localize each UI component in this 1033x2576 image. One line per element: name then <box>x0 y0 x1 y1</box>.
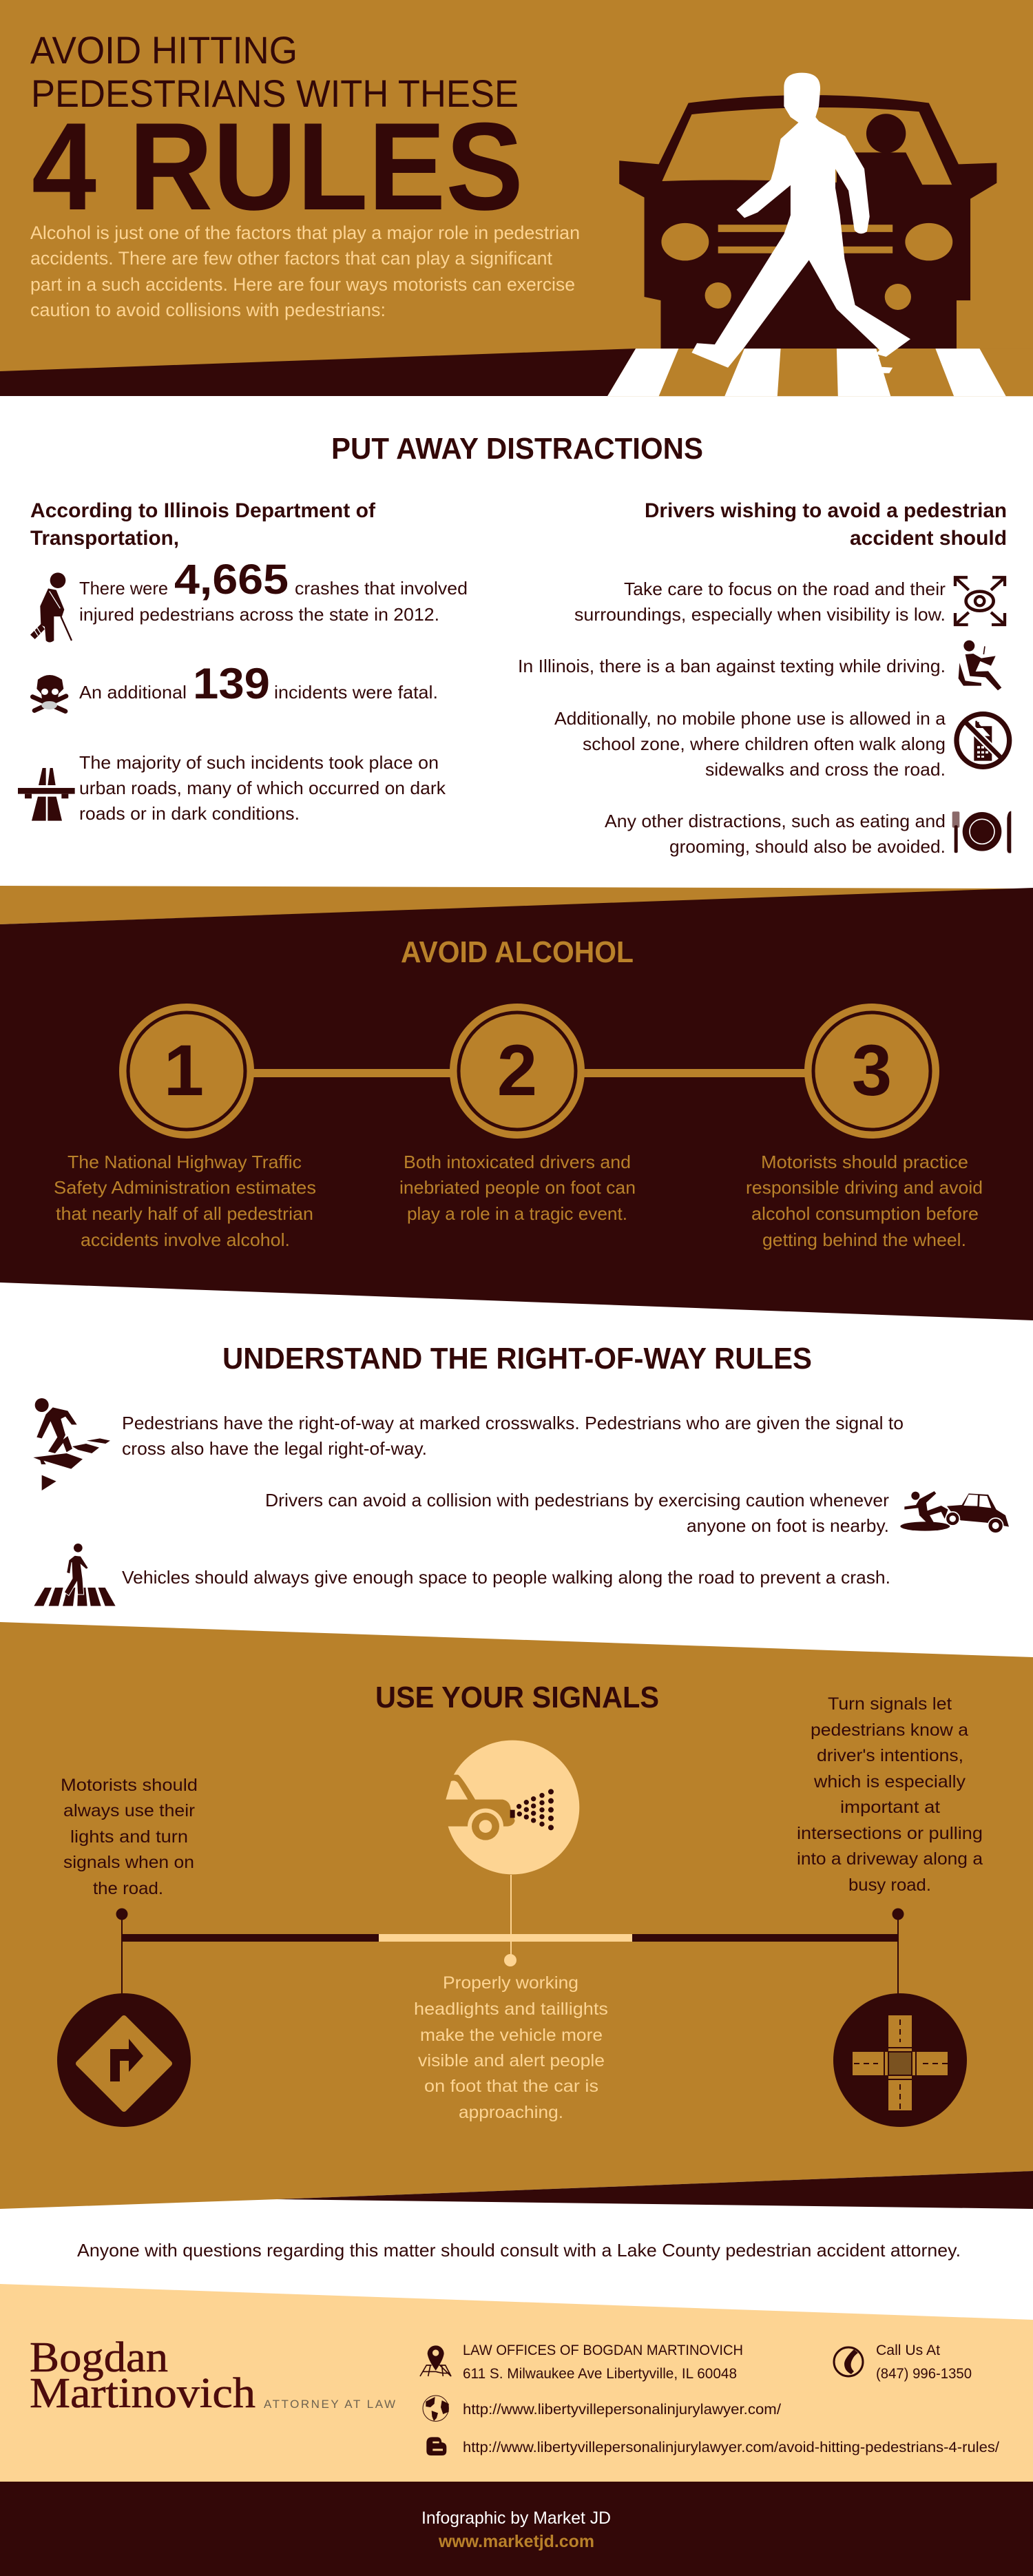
panel: driver guidance <box>518 499 1011 857</box>
stat: 4,665 crashes: injured pedestrians across the state in 2012. <box>79 604 439 625</box>
step 3 badge: 3 <box>852 1030 892 1111</box>
text: infographic by: Infographic by Market JD <box>421 2509 611 2528</box>
text: article url: http://www.libertyvillepersonalinjurylawyer.com/avoid-hitting-pedestrians-4-rules/ <box>463 2440 999 2455</box>
panel: use your signals <box>0 1622 1033 2209</box>
text: turn signals <box>797 1694 983 1895</box>
text: urban roads: The majority of such incidents took place on <box>79 752 439 773</box>
text: focus on road <box>574 579 946 625</box>
subheading: according to illinois <box>30 499 376 550</box>
heading: use your signals: USE YOUR SIGNALS <box>375 1681 659 1714</box>
text: office address <box>463 2343 743 2382</box>
icon: eye with arrows <box>955 577 1005 625</box>
text: motorists should use lights: the road. <box>93 1879 163 1898</box>
heading: put away distractions: PUT AWAY DISTRACTIONS <box>331 432 703 466</box>
text: working headlights: visible and alert people <box>418 2051 605 2070</box>
intro paragraph: accidents. There are few other factors that can play a significant <box>30 248 552 269</box>
step 1 text: The National Highway Traffic <box>67 1152 302 1172</box>
stat: 139 fatal incidents: incidents were fatal. <box>274 682 438 703</box>
step 2 text: inebriated people on foot can <box>399 1177 636 1198</box>
subheading: according to illinois: According to Illinois Department of <box>30 499 376 522</box>
stat: 139 fatal incidents: 139 <box>193 660 270 708</box>
text: texting ban: In Illinois, there is a ban against texting while driving. <box>518 656 946 676</box>
text: marked crosswalks: Pedestrians have the right-of-way at marked crosswalks. Pedestrians who are given the signal to <box>122 1413 904 1433</box>
icon: pedestrian on zebra crossing <box>34 1544 116 1606</box>
subheading: drivers wishing: Drivers wishing to avoid a pedestrian <box>645 499 1007 522</box>
text: focus on road: Take care to focus on the road and their <box>624 579 946 599</box>
text: phone number: (847) 996-1350 <box>876 2366 972 2382</box>
text: phone number: Call Us At <box>876 2343 940 2358</box>
intro paragraph: Alcohol is just one of the factors that play a major role in pedestrian <box>30 222 580 243</box>
logo: bogdan martinovich: Bogdan <box>30 2334 168 2381</box>
stat: 4,665 crashes: 4,665 <box>174 556 289 603</box>
logo: bogdan martinovich: Martinovich <box>30 2370 255 2417</box>
icon: pedestrian striding across crossing <box>33 1398 110 1490</box>
title: 4 rules: 4 RULES <box>32 97 523 236</box>
step 3 badge <box>804 1004 939 1139</box>
text: other distractions <box>605 811 946 857</box>
text: enough space: Vehicles should always give enough space to people walking along the road to prevent a crash. <box>122 1567 890 1588</box>
panel: hero header <box>0 0 1033 396</box>
icon: globe <box>423 2396 449 2421</box>
panel: avoid alcohol <box>0 886 1033 1320</box>
stat: 4,665 crashes: There were <box>79 578 168 599</box>
text: office address: LAW OFFICES OF BOGDAN MARTINOVICH <box>463 2343 743 2358</box>
icon: car striking pedestrian <box>900 1491 1009 1533</box>
icon: right turn sign <box>57 1993 191 2127</box>
icon: highway overpass <box>18 768 75 821</box>
text: motorists should use lights: signals when on <box>63 1853 194 1872</box>
intro paragraph: part in a such accidents. Here are four ways motorists can exercise <box>30 274 575 295</box>
panel: illinois statistics <box>18 499 468 824</box>
text: marked crosswalks: cross also have the legal right-of-way. <box>122 1438 427 1459</box>
icon: map pin <box>420 2345 451 2376</box>
panel: right-of-way rules <box>33 1342 1009 1606</box>
text: avoid collision <box>265 1490 889 1536</box>
text: school zone: Additionally, no mobile phone use is allowed in a <box>554 708 946 729</box>
icon: no mobile phone <box>957 714 1010 767</box>
intro paragraph <box>30 222 580 320</box>
step 1 text: accidents involve alcohol. <box>81 1229 290 1250</box>
icon: skull and crossbones <box>32 675 66 711</box>
text: turn signals: pedestrians know a <box>811 1721 968 1740</box>
text: focus on road: surroundings, especially when visibility is low. <box>574 604 946 625</box>
text: motorists should use lights <box>61 1776 198 1898</box>
timeline bar <box>116 1875 904 1995</box>
title: avoid hitting pedestrians: PEDESTRIANS WITH THESE <box>31 72 519 115</box>
text: urban roads: roads or in dark conditions. <box>79 803 300 824</box>
step 1 badge <box>119 1004 254 1139</box>
step 3 text: responsible driving and avoid <box>746 1177 983 1198</box>
step 3 text <box>746 1152 983 1250</box>
text: turn signals: which is especially <box>813 1772 966 1791</box>
step 3 text: Motorists should practice <box>761 1152 968 1172</box>
text: working headlights: headlights and taillights <box>414 1999 608 2019</box>
step 1 badge: 1 <box>164 1030 204 1111</box>
step 2 text <box>399 1152 636 1224</box>
text: motorists should use lights: lights and turn <box>70 1827 188 1847</box>
stat: 4,665 crashes: crashes that involved <box>295 578 468 599</box>
illustration: car and pedestrian on crosswalk <box>607 73 1033 396</box>
step 2 text: Both intoxicated drivers and <box>404 1152 631 1172</box>
text: avoid collision: anyone on foot is nearby. <box>687 1515 889 1536</box>
text: marked crosswalks <box>122 1413 904 1459</box>
title: avoid hitting pedestrians: AVOID HITTING <box>30 28 298 72</box>
text: urban roads: urban roads, many of which occurred on dark <box>79 778 446 798</box>
icon: blogger <box>426 2437 446 2455</box>
text: website url: http://www.libertyvillepersonalinjurylawyer.com/ <box>463 2402 781 2418</box>
heading: avoid alcohol: AVOID ALCOHOL <box>401 935 634 969</box>
text: turn signals: Turn signals let <box>828 1694 952 1714</box>
text: turn signals: into a driveway along a <box>797 1849 983 1869</box>
text: other distractions: grooming, should also be avoided. <box>669 836 946 857</box>
text: avoid collision: Drivers can avoid a collision with pedestrians by exercising caution whenever <box>265 1490 889 1510</box>
logo: bogdan martinovich <box>30 2334 395 2417</box>
heading: understand the right-of-way rules: UNDERSTAND THE RIGHT-OF-WAY RULES <box>222 1342 812 1375</box>
text: working headlights: on foot that the car is <box>424 2077 598 2096</box>
step 1 text: that nearly half of all pedestrian <box>56 1203 313 1224</box>
icon: plate and cutlery <box>952 811 1011 853</box>
text: turn signals: intersections or pulling <box>797 1824 983 1843</box>
text: school zone: school zone, where children often walk along <box>583 734 946 754</box>
text: office address: 611 S. Milwaukee Ave Libertyville, IL 60048 <box>463 2366 737 2382</box>
icon: driver texting <box>959 641 1001 690</box>
text: turn signals: busy road. <box>848 1876 931 1895</box>
text: school zone: sidewalks and cross the road. <box>705 759 946 780</box>
subheading: drivers wishing: accident should <box>850 527 1007 550</box>
closing statement: Anyone with questions regarding this matter should consult with a Lake County pedestrian accident attorney. <box>77 2240 961 2261</box>
text: other distractions: Any other distractions, such as eating and <box>605 811 946 831</box>
step 3 text: getting behind the wheel. <box>762 1229 966 1250</box>
panel: footer credit <box>0 2482 1033 2576</box>
icon: telephone <box>834 2347 863 2376</box>
text: working headlights <box>414 1973 608 2122</box>
text: turn signals: important at <box>840 1798 940 1817</box>
text: phone number <box>876 2343 972 2382</box>
text: turn signals: driver's intentions, <box>817 1746 963 1765</box>
subheading: according to illinois: Transportation, <box>30 527 179 550</box>
icon: car headlight beam <box>441 1741 579 1874</box>
text: working headlights: Properly working <box>443 1973 578 1993</box>
connector line <box>187 1069 872 1077</box>
stat: 139 fatal incidents: An additional <box>79 682 187 703</box>
text: website: www.marketjd.com <box>438 2532 594 2551</box>
text: motorists should use lights: Motorists should <box>61 1776 198 1795</box>
text: working headlights: approaching. <box>459 2103 563 2122</box>
step 2 badge <box>450 1004 585 1139</box>
stat: 139 fatal incidents <box>79 660 438 708</box>
panel: contact details <box>0 2284 1033 2482</box>
step 2 text: play a role in a tragic event. <box>407 1203 627 1224</box>
text: school zone <box>554 708 946 780</box>
step 2 badge: 2 <box>497 1030 537 1111</box>
subheading: drivers wishing <box>645 499 1007 550</box>
step 3 text: alcohol consumption before <box>751 1203 979 1224</box>
text: motorists should use lights: always use their <box>63 1801 195 1820</box>
icon: injured pedestrian with cane <box>30 572 72 642</box>
title: avoid hitting pedestrians <box>30 28 519 115</box>
step 1 text: Safety Administration estimates <box>54 1177 316 1198</box>
icon: intersection <box>833 1993 967 2127</box>
logo: bogdan martinovich: ATTORNEY AT LAW <box>264 2398 395 2411</box>
stat: 4,665 crashes <box>79 556 468 625</box>
intro paragraph: caution to avoid collisions with pedestrians: <box>30 300 386 320</box>
step 1 text <box>54 1152 316 1250</box>
text: urban roads <box>79 752 446 824</box>
text: working headlights: make the vehicle more <box>420 2026 603 2045</box>
